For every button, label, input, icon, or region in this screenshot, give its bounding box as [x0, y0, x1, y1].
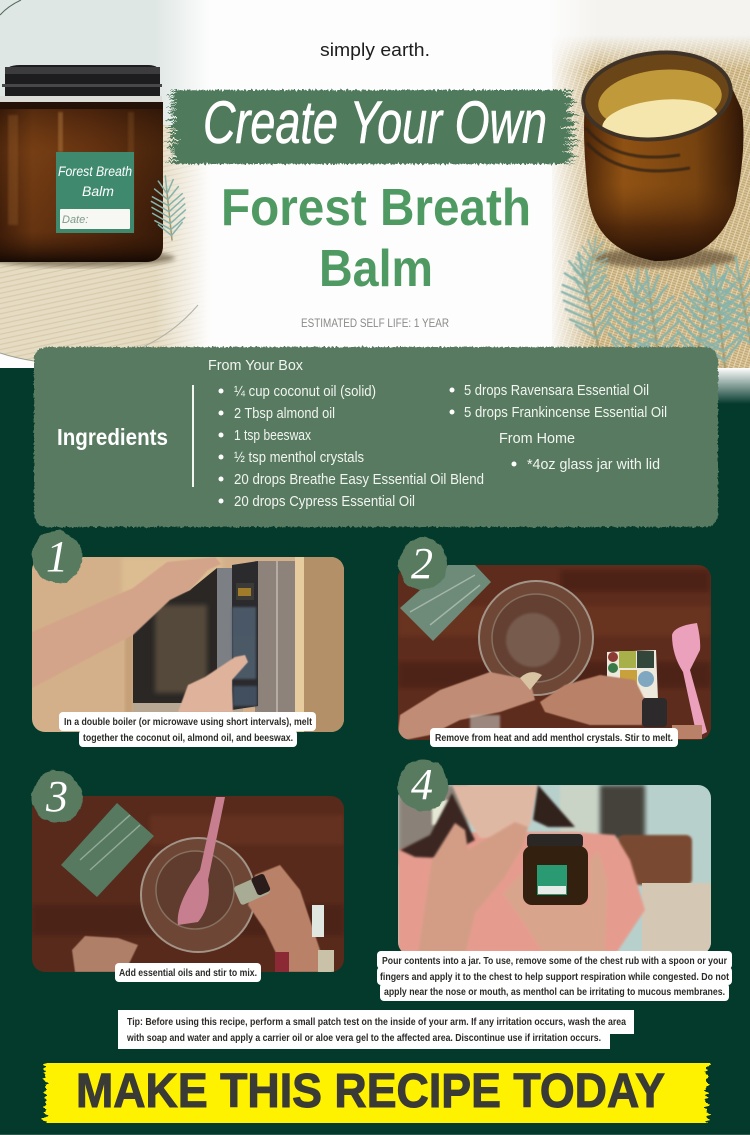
- step 2: [398, 538, 711, 747]
- icon: fir sprig: [150, 175, 186, 241]
- balm inside jar: [581, 50, 733, 142]
- labelled jar: [523, 834, 588, 905]
- jar body: [584, 90, 743, 261]
- heading: Forest Breath Balm: Balm: [319, 240, 433, 298]
- list: from your box: 1 tsp beeswax: [234, 428, 312, 444]
- tip box: with soap and water and apply a carrier oil or aloe vera gel to the affected area. Discontinue use if irritation occurs.: [126, 1033, 601, 1044]
- list: from your box: 20 drops Cypress Essential Oil: [234, 494, 415, 510]
- call to action banner: MAKE THIS RECIPE TODAY: [76, 1065, 665, 1118]
- caption: together the coconut oil, almond oil, and beeswax.: [83, 733, 293, 744]
- right edge fade: [712, 368, 750, 404]
- list: from home: [499, 431, 660, 473]
- photo: adding essential oil to bowl: [32, 796, 344, 972]
- heading: Forest Breath Balm: Forest Breath: [221, 179, 531, 237]
- step 4: [377, 759, 732, 1001]
- jar label: [56, 152, 134, 233]
- caption: [430, 728, 678, 747]
- caption: Add essential oils and stir to mix.: [119, 968, 257, 979]
- heading: ingredients: Ingredients: [57, 424, 168, 450]
- title banner: [172, 89, 572, 164]
- tip box: [118, 1010, 634, 1049]
- list: from your box: 5 drops Frankincense Essential Oil: [464, 405, 667, 421]
- caption: [59, 712, 316, 747]
- number badge: [32, 531, 82, 583]
- jar lid: [5, 65, 160, 96]
- list: from your box: 5 drops Ravensara Essential Oil: [464, 383, 649, 399]
- list: from your box: 2 Tbsp almond oil: [234, 406, 335, 422]
- photo: bowl on wood table: [398, 565, 711, 740]
- logo: simply earth.: [320, 40, 430, 60]
- number badge: 1: [46, 532, 68, 581]
- header panel: [0, 0, 750, 373]
- step 1: [32, 531, 344, 747]
- icon: fir branches: [555, 234, 750, 373]
- caption: Remove from heat and add menthol crystals. Stir to melt.: [435, 733, 673, 744]
- list: from your box: From Your Box: [208, 358, 304, 374]
- number badge: [32, 771, 82, 823]
- caption: In a double boiler (or microwave using short intervals), melt: [64, 717, 313, 728]
- number badge: 2: [411, 539, 433, 588]
- shelf life note: ESTIMATED SELF LIFE: 1 YEAR: [301, 318, 449, 330]
- number badge: [398, 759, 448, 811]
- list: from your box: ½ tsp menthol crystals: [234, 450, 364, 466]
- photo: amber jar with label: [0, 0, 220, 368]
- caption: [377, 951, 732, 1001]
- list: from your box: ¼ cup coconut oil (solid): [234, 384, 376, 400]
- heading: Forest Breath Balm: [224, 188, 528, 286]
- step 3: [32, 771, 344, 982]
- list: from your box: [208, 358, 667, 510]
- caption: [115, 963, 261, 982]
- tip box: Tip: Before using this recipe, perform a small patch test on the inside of your arm. If any irritation occurs, wash the area: [127, 1017, 626, 1028]
- number badge: 4: [411, 760, 433, 809]
- jar label: Date:: [62, 214, 88, 226]
- jar label: Forest Breath: [58, 163, 132, 179]
- list: from home: From Home: [499, 431, 575, 447]
- list: from your box: 20 drops Breathe Easy Essential Oil Blend: [234, 472, 484, 488]
- jar body: [0, 105, 163, 262]
- number badge: 3: [45, 772, 68, 821]
- photo: open jar of balm: [552, 0, 750, 368]
- title banner: Create Your Own: [203, 89, 547, 156]
- photo: woman holding labelled jar: [398, 785, 711, 955]
- photo: hand on microwave: [32, 557, 344, 732]
- panel: ingredients: [34, 347, 718, 527]
- jar label: Balm: [82, 183, 114, 199]
- list: from home: *4oz glass jar with lid: [527, 457, 660, 473]
- number badge: [399, 538, 447, 590]
